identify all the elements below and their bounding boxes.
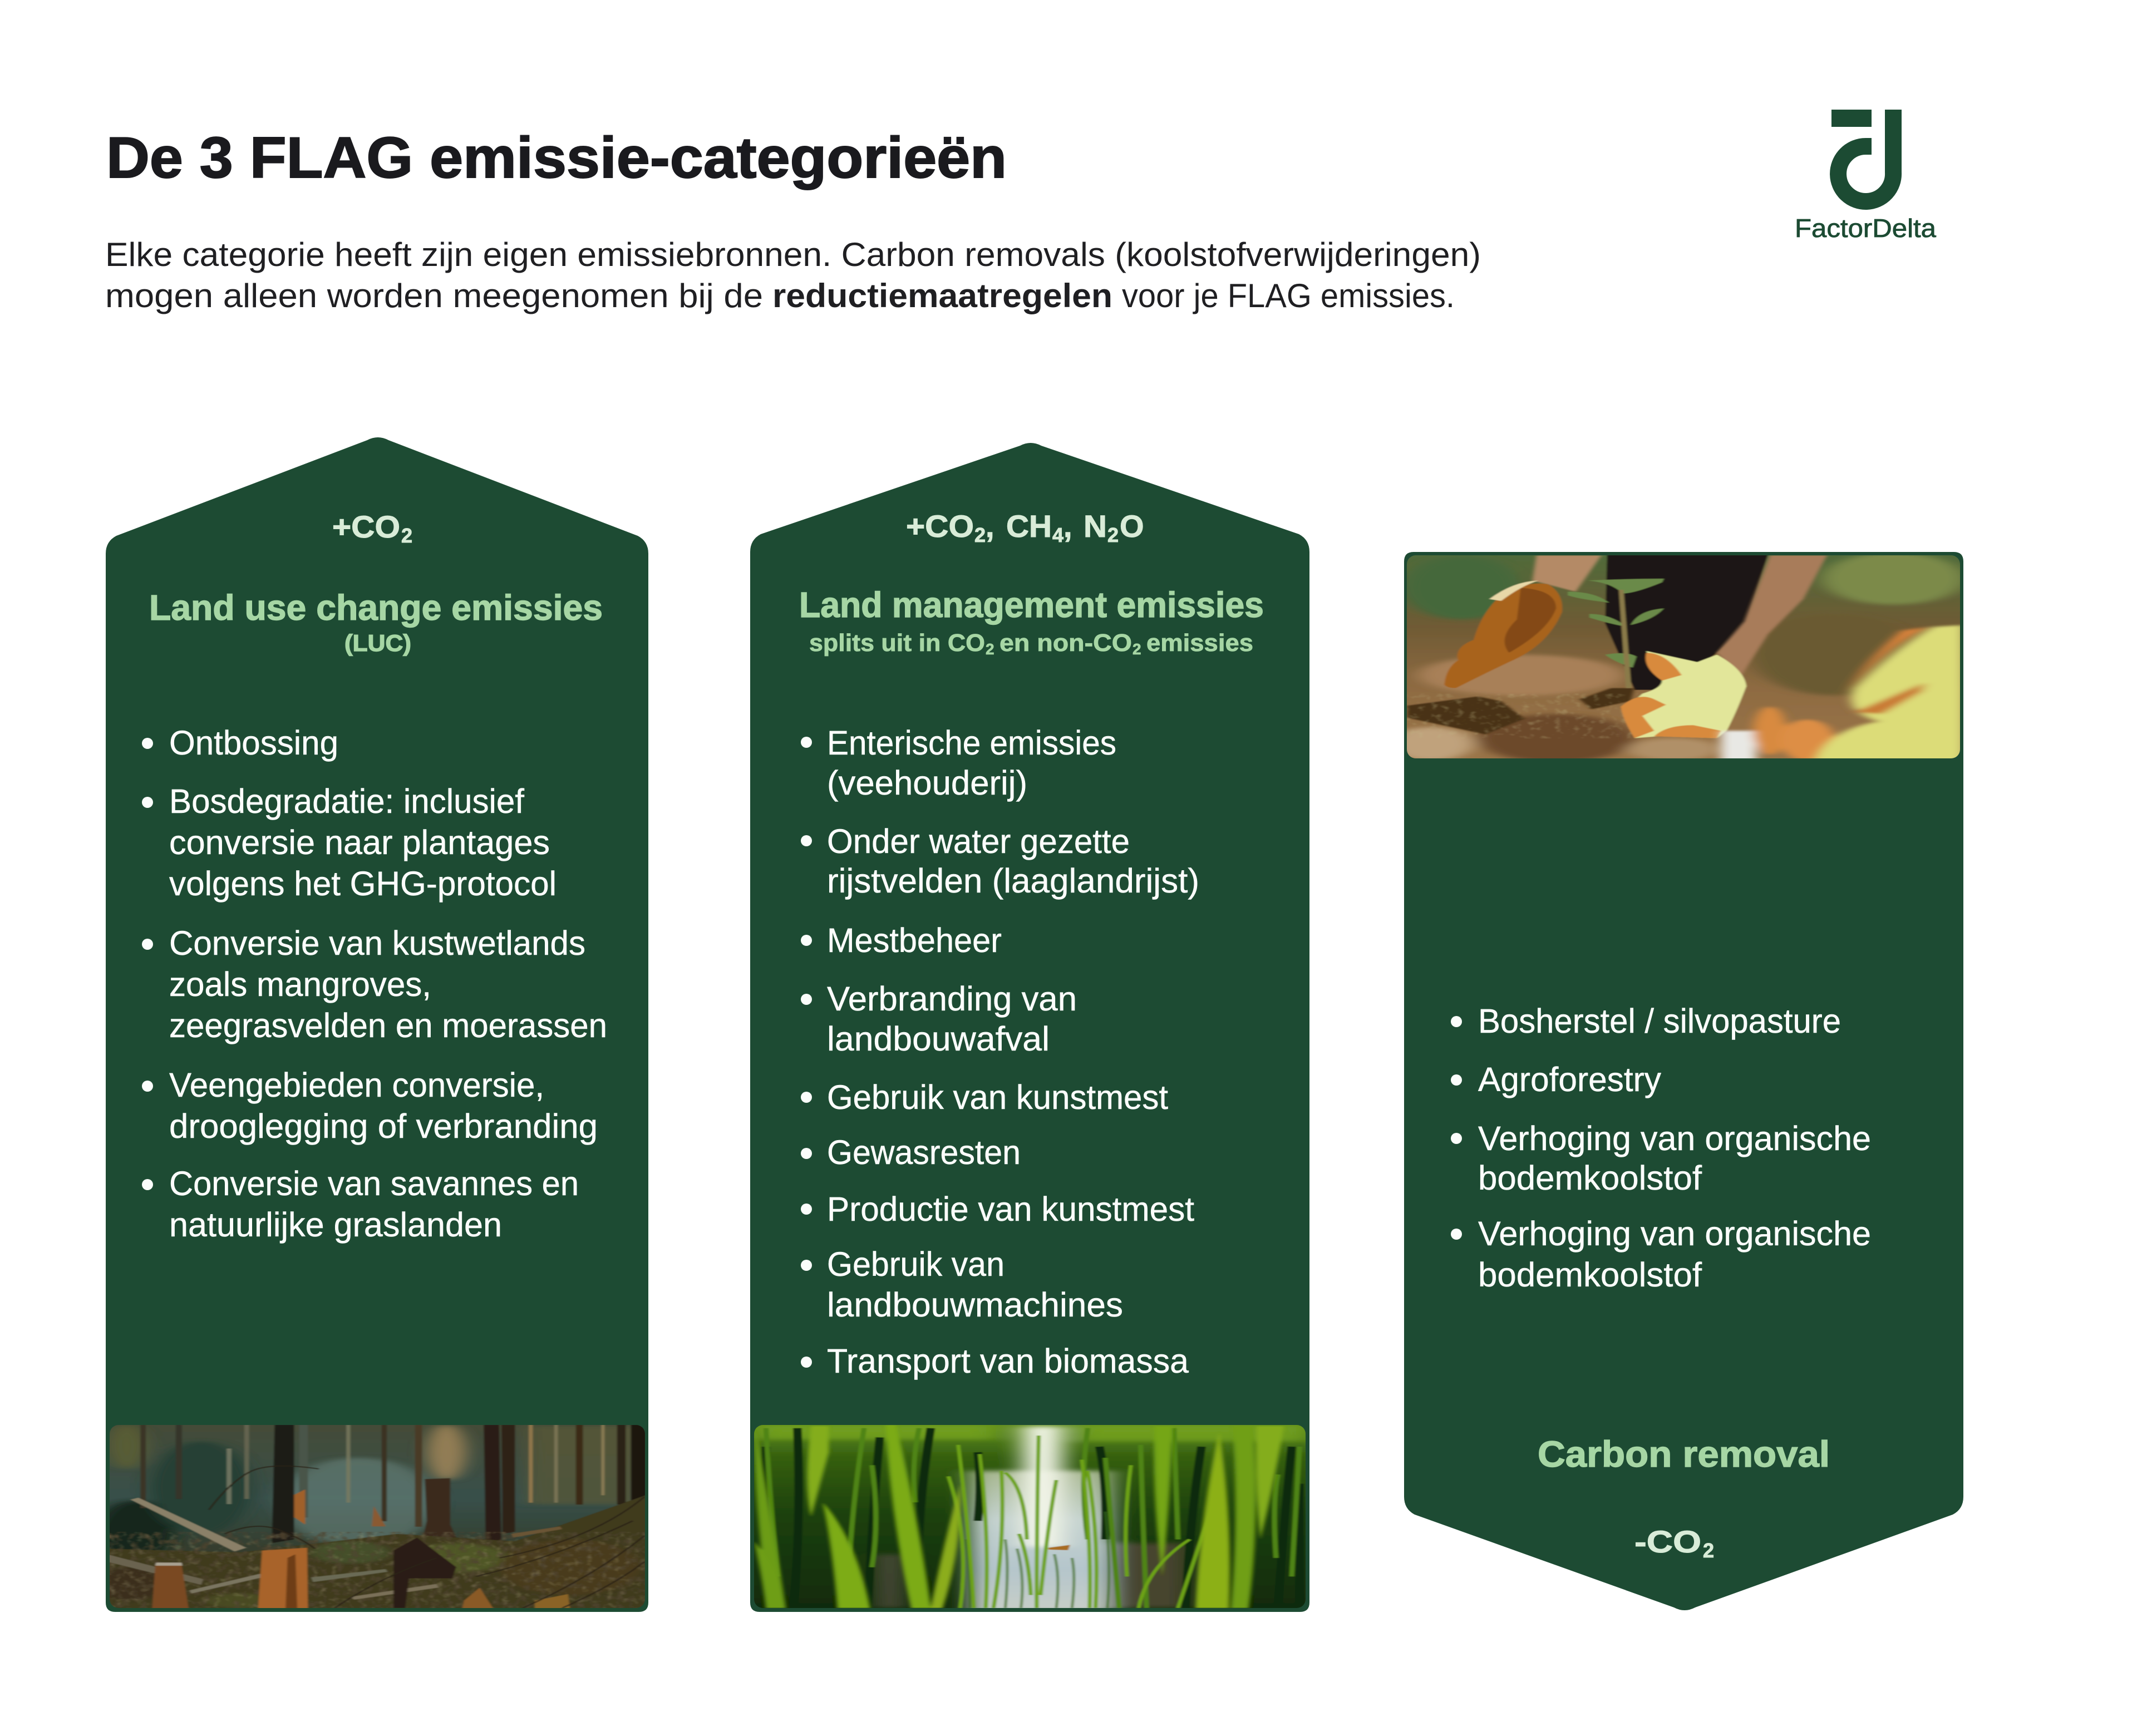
intro text: voor je FLAG emissies.	[1122, 277, 1455, 314]
bullet list: zoals mangroves,	[169, 965, 431, 1003]
bullet list: bodemkoolstof	[1478, 1256, 1702, 1294]
panel: land use change emissies	[95, 437, 648, 1612]
bullet list: Bosdegradatie: inclusief	[169, 782, 525, 820]
logo wordmark: FactorDelta	[1795, 214, 1936, 243]
panel: carbon removal	[1387, 552, 1968, 1610]
panel shape	[106, 437, 648, 1612]
bullet list: zeegrasvelden en moerassen	[169, 1007, 607, 1044]
panel shape	[1404, 552, 1963, 1610]
bullet list: Conversie van savannes en	[169, 1165, 579, 1202]
photo: hands planting a seedling	[1387, 553, 1968, 762]
panel heading: Land use change emissies	[149, 588, 603, 628]
gas label: 2	[401, 524, 412, 547]
panel subheading: splits uit in CO	[809, 629, 985, 657]
panel subheading: emissies	[1146, 629, 1253, 657]
bullet list: (veehouderij)	[827, 764, 1027, 802]
intro text: Elke categorie heeft zijn eigen emissiebronnen. Carbon removals (koolstofverwijderingen)	[105, 236, 1481, 273]
bullet list: Gebruik van	[827, 1245, 1005, 1283]
bullet list: Productie van kunstmest	[827, 1190, 1194, 1228]
bullet list: rijstvelden (laaglandrijst)	[827, 862, 1199, 900]
panel heading: Carbon removal	[1538, 1433, 1830, 1474]
bullet list	[801, 724, 1199, 1380]
gas label: +CO	[332, 509, 400, 544]
bullet list: Gebruik van kunstmest	[827, 1078, 1168, 1116]
gas label: 2	[1107, 524, 1119, 546]
bullet list	[1451, 1002, 1871, 1294]
photo: burnt and felled forest	[95, 1424, 648, 1610]
gas label: +CO	[906, 509, 974, 544]
panel subheading: 2	[986, 640, 994, 658]
intro text: reductiemaatregelen	[772, 277, 1112, 314]
bullet list: Mestbeheer	[827, 921, 1002, 959]
bullet list: Agroforestry	[1478, 1061, 1661, 1098]
bullet list: Verhoging van organische	[1478, 1119, 1871, 1157]
intro text	[105, 236, 1481, 314]
bullet list: Veengebieden conversie,	[169, 1066, 544, 1104]
bullet list: natuurlijke graslanden	[169, 1206, 502, 1244]
panel subheading: 2	[1132, 640, 1141, 658]
bullet list: Verhoging van organische	[1478, 1215, 1871, 1252]
title: De 3 FLAG emissie-categorieën	[106, 126, 1007, 190]
gas label: ,	[1063, 509, 1072, 544]
bullet list: Bosherstel / silvopasture	[1478, 1002, 1841, 1040]
panel heading: Land management emissies	[799, 585, 1264, 625]
bullet list	[142, 724, 607, 1244]
icon: FactorDelta mark	[1831, 110, 1893, 201]
gas label: O	[1120, 509, 1144, 544]
panel subheading: (LUC)	[344, 630, 411, 656]
logo: FactorDelta	[1795, 110, 1936, 243]
bullet list: Ontbossing	[169, 724, 338, 762]
bullet list: Gewasresten	[827, 1133, 1021, 1171]
bullet list: landbouwafval	[827, 1020, 1050, 1058]
gas label: 2	[974, 524, 986, 546]
panel shape	[750, 443, 1309, 1612]
bullet list: Conversie van kustwetlands	[169, 924, 585, 962]
bullet list: landbouwmachines	[827, 1286, 1123, 1324]
gas label: 4	[1052, 524, 1063, 546]
gas label: ,	[986, 509, 994, 544]
gas label: CH	[1006, 509, 1052, 544]
panel subheading: en non-CO	[999, 629, 1132, 657]
bullet list: bodemkoolstof	[1478, 1159, 1702, 1197]
bullet list: Verbranding van	[827, 980, 1077, 1018]
bullet list: conversie naar plantages	[169, 823, 550, 861]
gas label: -CO	[1634, 1524, 1701, 1559]
photo: flooded rice field	[750, 1424, 1311, 1612]
bullet list: Transport van biomassa	[827, 1342, 1189, 1380]
bullet list: drooglegging of verbranding	[169, 1107, 598, 1145]
bullet list: volgens het GHG-protocol	[169, 865, 557, 902]
bullet list: Enterische emissies	[827, 724, 1116, 762]
gas label: N	[1084, 509, 1107, 544]
intro text: mogen alleen worden meegenomen bij de	[105, 277, 763, 314]
gas label: 2	[1703, 1539, 1714, 1562]
bullet list: Onder water gezette	[827, 822, 1130, 860]
panel: land management emissies	[750, 443, 1311, 1612]
